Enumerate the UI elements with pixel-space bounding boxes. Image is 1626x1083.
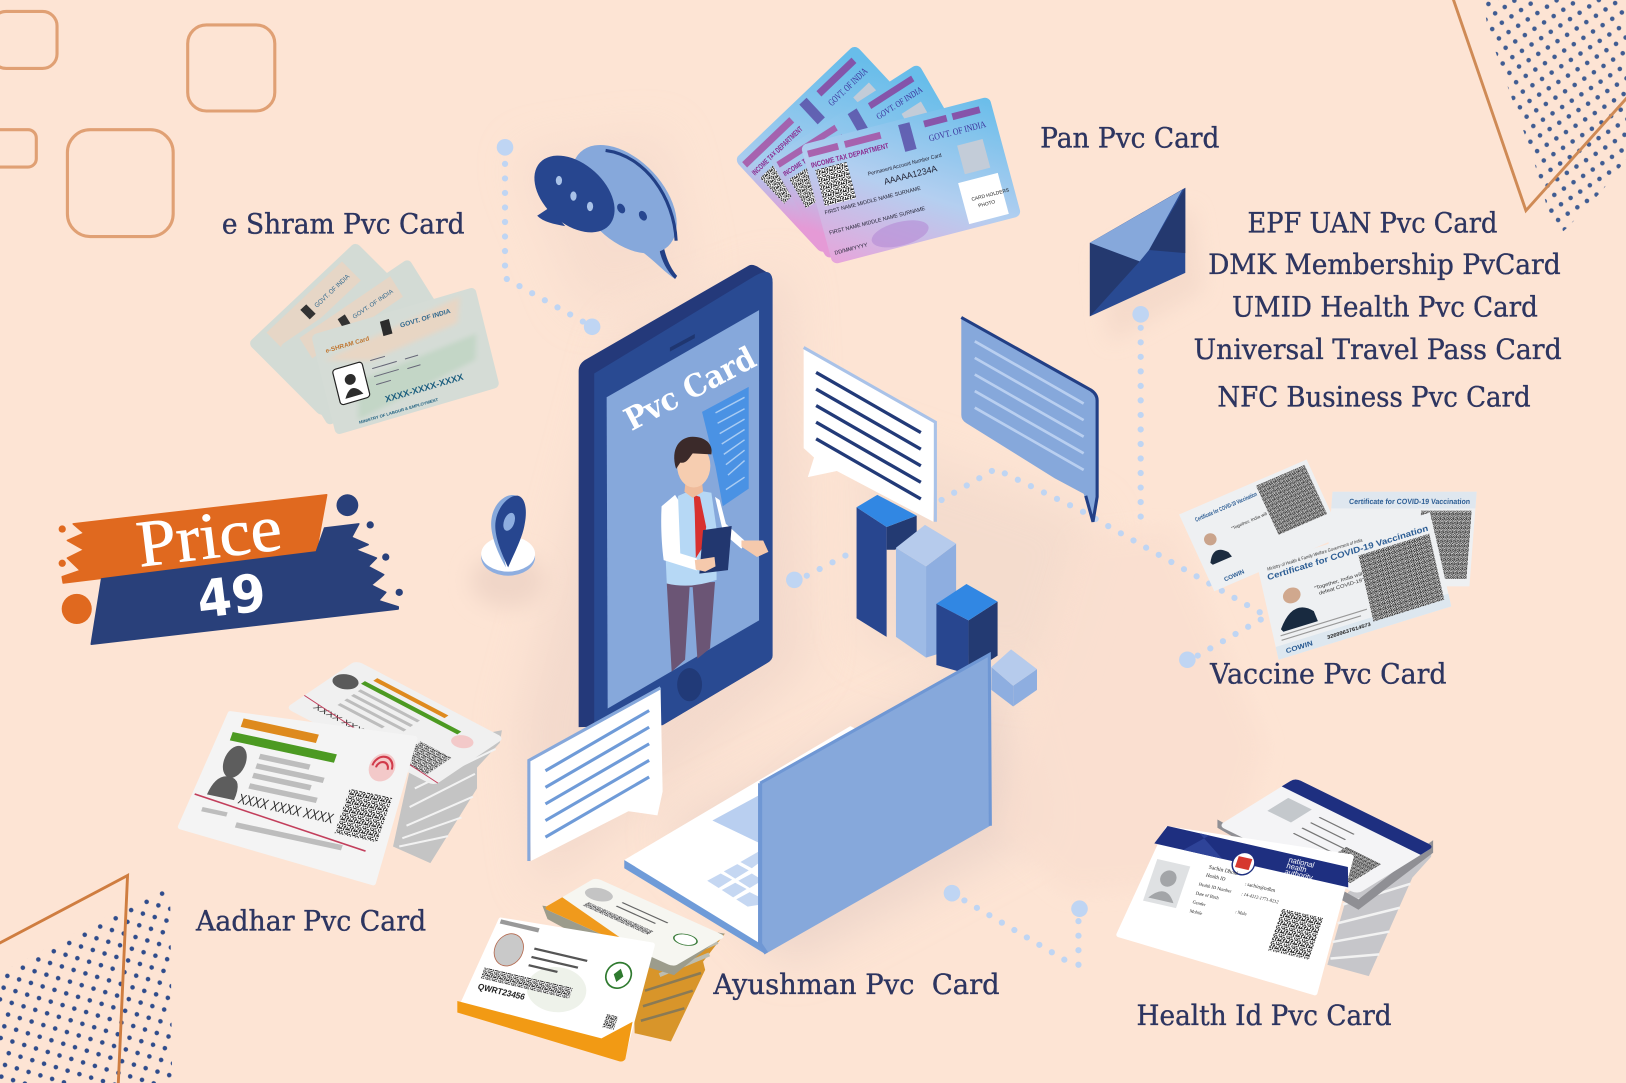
card image: PAN cards: GOVT. OF INDIA	[826, 65, 870, 108]
soft shadows behind illustration	[471, 135, 1265, 965]
decoration: dotted triangle bottom left	[0, 876, 172, 1083]
illustration: laptop	[624, 655, 990, 953]
card image: Health ID cards: : 14-4212-1771-8212	[1241, 891, 1280, 905]
card image: e-Shram cards: GOVT. OF INDIA	[313, 273, 352, 309]
card image: PAN cards: GOVT. OF INDIA	[874, 84, 925, 122]
card image: PAN cards: INCOME TAX DEPARTMENT	[782, 134, 846, 178]
card image: Ayushman cards: QWRT23456	[476, 981, 527, 1002]
card image: e-Shram cards: GOVT. OF INDIA	[352, 288, 395, 321]
card image: PAN cards: INCOME TAX DEPARTMENT	[751, 125, 805, 177]
card image: PAN cards: PHOTO	[978, 199, 996, 209]
card image: vaccine cards: "Together, India will	[1314, 572, 1363, 592]
card image: e-Shram cards: MINISTRY OF LABOUR & EMPLOYMENT	[359, 397, 439, 425]
card image: PAN cards: INCOME TAX DEPARTMENT	[810, 141, 890, 170]
card image: Aadhaar cards	[180, 660, 504, 883]
dotted connector lines	[497, 139, 1270, 971]
card image: PAN cards: Permanent Account Number Card	[867, 153, 942, 178]
card image: PAN cards: FIRST NAME MIDDLE NAME SURNAME	[829, 206, 926, 237]
card image: Health ID cards: authority	[1283, 867, 1314, 882]
card image: e-Shram cards	[248, 242, 500, 435]
price heading: Price	[133, 492, 286, 582]
card image: vaccine cards: Certificate for COVID-19 Vaccination	[1194, 491, 1258, 524]
label: EPF UAN: EPF UAN Pvc Card	[1247, 206, 1497, 239]
card image: vaccine cards	[1179, 460, 1477, 660]
speech bubble: white upper	[804, 348, 935, 522]
card image: PAN cards: DD/MM/YYYY	[834, 242, 869, 257]
phone screen	[607, 310, 759, 709]
label: Universal Travel Pass: Universal Travel Pass Card	[1194, 333, 1562, 366]
card image: PAN cards: FIRST NAME MIDDLE NAME SURNAME	[824, 186, 922, 216]
card image: vaccine cards: "Together, India will	[1230, 511, 1268, 531]
label: DMK Membership: DMK Membership PvCard	[1208, 248, 1561, 281]
phone title text: Pvc Card	[619, 340, 762, 438]
illustration: smartphone	[579, 265, 773, 727]
card image: Health ID cards	[1119, 778, 1434, 993]
label: Vaccine Pvc Card: Vaccine Pvc Card	[1209, 658, 1447, 691]
label: e Shram Pvc Card: e Shram Pvc Card	[222, 207, 465, 240]
card image: Ayushman cards	[457, 878, 726, 1061]
card image: vaccine cards: COWIN	[1285, 639, 1314, 655]
card image: vaccine cards: Certificate for COVID-19 Vaccination	[1349, 497, 1471, 506]
card image: Health ID cards: Mobile	[1189, 908, 1203, 916]
card image: Health ID cards: health	[1285, 861, 1308, 874]
phone speaker	[670, 334, 695, 352]
card image: Aadhaar cards: XXXX XXXX X	[310, 704, 382, 743]
card image: vaccine cards: COWIN	[1223, 568, 1246, 583]
card image: PAN cards: GOVT. OF INDIA	[928, 120, 987, 144]
label: Aadhar Pvc Card: Aadhar Pvc Card	[195, 905, 426, 938]
card image: PAN cards	[734, 44, 1021, 265]
decoration: dotted triangle top right	[1453, 0, 1626, 235]
label: Health Id Pvc Card: Health Id Pvc Card	[1137, 999, 1392, 1032]
price value: 49	[194, 563, 269, 631]
card image: Health ID cards: Health ID Number	[1198, 882, 1233, 894]
card image: Health ID cards: Date of Birth	[1195, 890, 1220, 901]
phone home button	[677, 668, 702, 701]
card image: e-Shram cards: XXXX-XXXX-XXXX	[384, 372, 465, 404]
icon: location pin	[481, 495, 535, 576]
card image: PAN cards: AAAAA1234A	[883, 163, 938, 187]
label: UMID Health: UMID Health Pvc Card	[1232, 290, 1538, 323]
icon: chat bubbles	[520, 125, 697, 279]
speech bubble: white lower	[529, 688, 663, 861]
card image: e-Shram cards: e-SHRAM Card	[325, 335, 370, 355]
card image: Health ID cards: : sachin@ndhm	[1244, 881, 1276, 894]
card image: vaccine cards: 32699637614573	[1327, 622, 1371, 641]
label: Ayushman Pvc Card: Ayushman Pvc Card	[712, 968, 1000, 1001]
card image: Health ID cards: Sachin Dhoni	[1208, 865, 1239, 877]
card image: vaccine cards: Certificate for COVID-19 Vaccination	[1266, 523, 1429, 582]
price badge	[59, 492, 403, 644]
speech bubble: blue right	[961, 317, 1097, 522]
card image: Health ID cards: Gender	[1192, 899, 1207, 907]
card image: Health ID cards: : Male	[1235, 909, 1247, 916]
card image: Aadhaar cards: XXXX XXXX XXXX	[236, 791, 336, 826]
label: Pan Pvc Card: Pan Pvc Card	[1040, 121, 1220, 154]
person	[661, 437, 768, 672]
bar chart blocks	[857, 495, 1037, 706]
card image: PAN cards: CARD HOLDERS	[971, 187, 1011, 203]
card image: Health ID cards: national	[1287, 855, 1316, 870]
card image: Health ID cards: Health ID	[1205, 872, 1227, 883]
document on screen	[702, 387, 749, 506]
card image: vaccine cards: Ministry of Health & Family Welfare Government of India	[1267, 538, 1363, 573]
card image: e-Shram cards: GOVT. OF INDIA	[399, 308, 451, 330]
card image: vaccine cards: defeat COVID-19"	[1319, 577, 1365, 597]
icon: envelope	[1090, 188, 1185, 316]
label: NFC Business: NFC Business Pvc Card	[1217, 381, 1531, 414]
decoration: rounded squares top left	[0, 11, 275, 237]
pan title bars	[807, 132, 882, 157]
